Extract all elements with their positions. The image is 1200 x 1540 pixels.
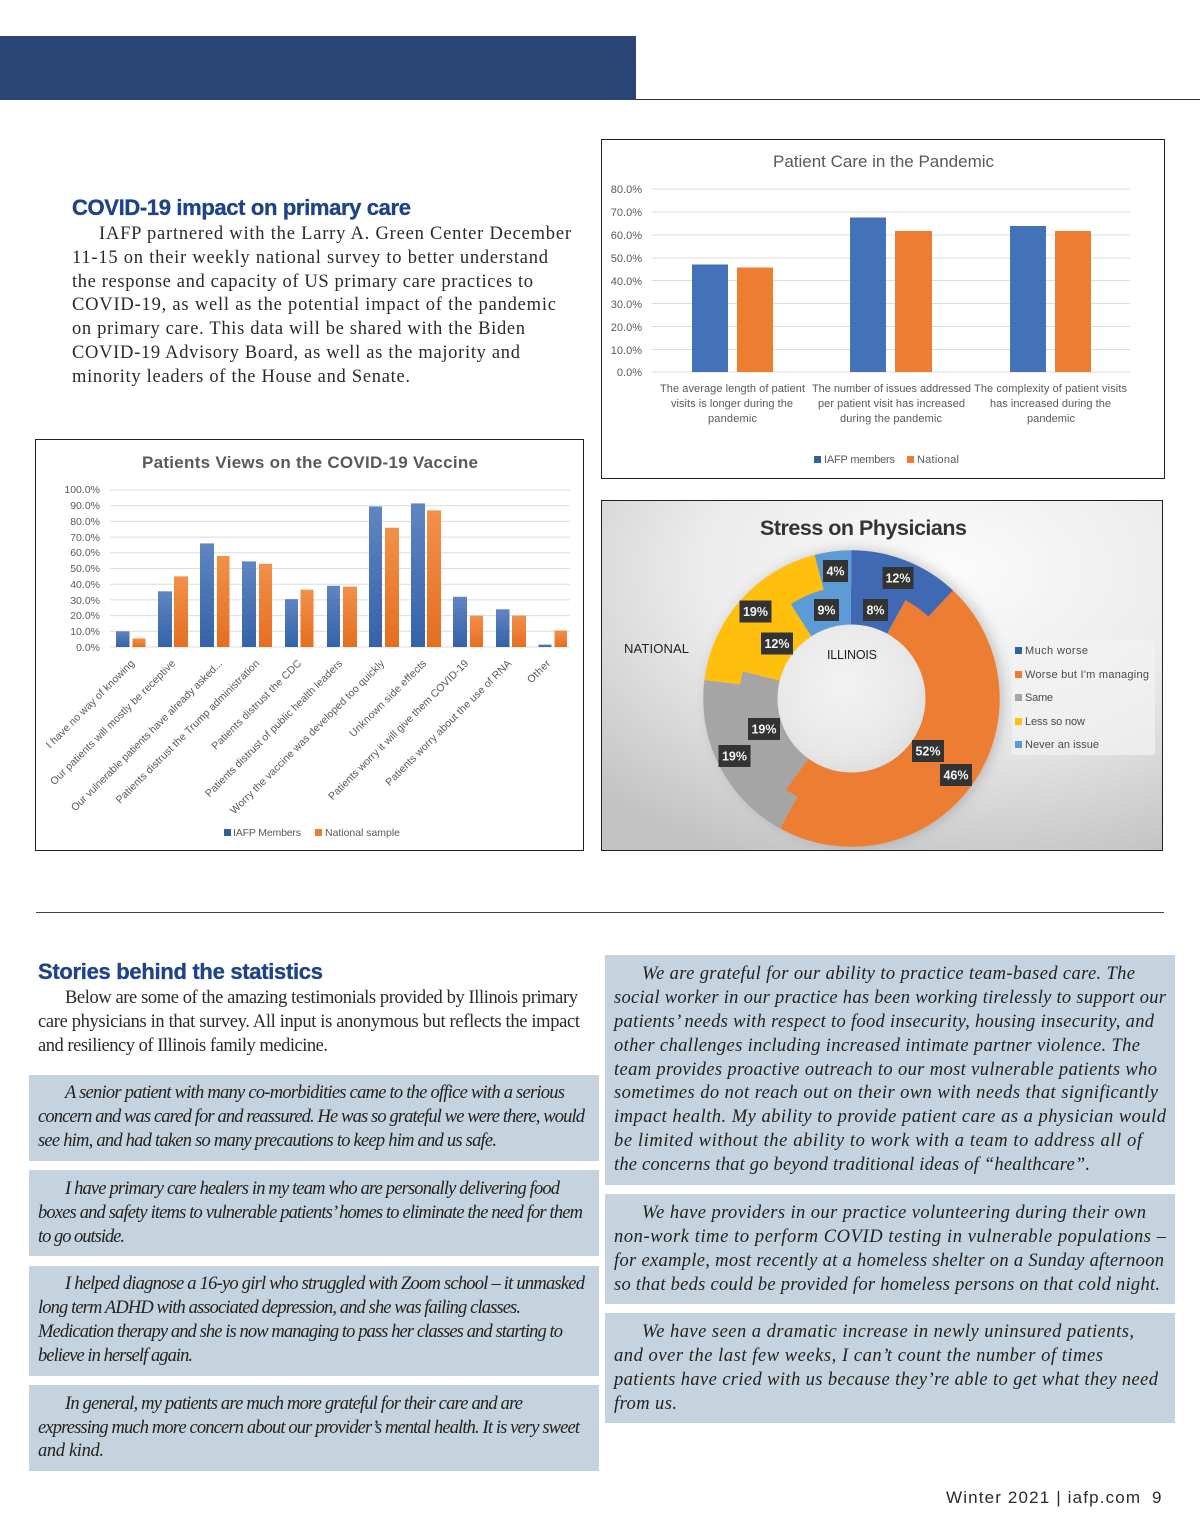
quote panel: team-based care: patients’ needs with respect to food insecurity, housing insecurity, and — [612, 1012, 1155, 1032]
text block: COVID-19 impact on primary care: 11-15 on their weekly national survey to better understand — [72, 248, 549, 268]
chart title: Patient Care in the Pandemic — [773, 152, 994, 171]
heading: Stories behind the statistics: Stories behind the statistics — [38, 959, 323, 984]
legend: National sample — [325, 827, 400, 839]
quote panel: 16-yo girl: believe in herself again. — [38, 1346, 193, 1366]
legend: Never an issue — [1025, 739, 1099, 751]
y axis labels: 10.0% — [611, 345, 642, 357]
quote panel: team-based care: social worker in our practice has been working tirelessly to support our — [614, 988, 1167, 1008]
quote panel: team-based care: the concerns that go beyond traditional ideas of “healthcare”. — [614, 1155, 1090, 1175]
y axis labels: 40.0% — [70, 579, 100, 591]
quote panel: uninsured patients: We have seen a dramatic increase in newly uninsured patients, — [642, 1322, 1134, 1342]
quote panel: team-based care: be limited without the ability to work with a team to address all of — [614, 1131, 1145, 1151]
rotated category labels: I have no way of knowing — [44, 658, 137, 751]
rotated category labels: Worry the vaccine was developed too quickly — [228, 657, 388, 817]
data labels: 12% — [764, 637, 790, 651]
quote panel: team-based care: impact health. My ability to provide patient care as a physician would — [614, 1107, 1167, 1127]
y axis labels: 30.0% — [70, 595, 100, 607]
quote panel: primary care healers — [29, 1170, 599, 1256]
chart: Patient Care in the Pandemic — [602, 140, 1164, 478]
data labels: 52% — [915, 744, 941, 758]
data labels: 9% — [817, 604, 836, 618]
data labels: 19% — [743, 605, 768, 619]
legend: Same — [1025, 692, 1053, 704]
category labels: The number of issues addressed — [812, 383, 971, 395]
quote panel: team-based care: We are grateful for our ability to practice team-based care. The — [642, 964, 1135, 984]
category labels: during the pandemic — [840, 413, 942, 425]
legend — [224, 827, 400, 839]
quote panel: senior patient: A senior patient with many co-morbidities came to the office with a serious — [63, 1083, 565, 1103]
y axis labels: 20.0% — [70, 610, 100, 622]
category labels: has increased during the — [990, 398, 1111, 410]
y axis labels: 60.0% — [611, 230, 642, 242]
quote panel: uninsured patients: and over the last few weeks, I can’t count the number of times — [614, 1346, 1103, 1366]
y axis labels: 60.0% — [70, 547, 100, 559]
chart title: Stress on Physicians — [760, 516, 967, 540]
data labels: 46% — [943, 768, 969, 782]
rotated category labels: Other — [525, 657, 553, 686]
rotated category labels: Patients distrust the CDC — [209, 657, 304, 752]
y axis labels: 70.0% — [611, 207, 642, 219]
y axis labels: 0.0% — [76, 642, 100, 654]
y axis labels: 10.0% — [70, 626, 100, 638]
quote panel: COVID testing volunteers: We have providers in our practice volunteering during their own — [642, 1203, 1146, 1223]
text block: Stories behind the statistics: Below are some of the amazing testimonials provided by Illinois primary — [65, 988, 579, 1008]
data labels: 12% — [885, 572, 911, 586]
category labels — [660, 383, 1128, 425]
legend: IAFP Members — [233, 827, 301, 839]
quote panel: more grateful: expressing much more concern about our provider’s mental health. It is very sweet — [38, 1418, 581, 1438]
rotated category labels: Patients distrust of public health leaders — [203, 658, 345, 800]
text block: Stories behind the statistics: and resiliency of Illinois family medicine. — [38, 1036, 328, 1056]
quote panel: COVID testing volunteers: for example, most recently at a homeless shelter on a Sunday afternoon — [614, 1251, 1164, 1271]
text block: COVID-19 impact on primary care: IAFP partnered with the Larry A. Green Center December — [99, 224, 571, 244]
legend: Much worse — [1025, 645, 1088, 657]
legend: Less so now — [1025, 716, 1085, 728]
text block: COVID-19 impact on primary care: the response and capacity of US primary care practices to — [72, 272, 533, 292]
rotated category labels: Patients worry it will give them COVID-19 — [326, 658, 471, 803]
footer: issue and page number: Winter 2021 | iafp.com — [946, 1488, 1140, 1507]
y axis labels: 80.0% — [611, 184, 642, 196]
data labels: 19% — [751, 722, 777, 736]
category labels: The average length of patient — [660, 383, 805, 395]
y axis labels — [64, 484, 100, 654]
chart title: Patients Views on the COVID-19 Vaccine — [142, 453, 478, 472]
quote panel: primary care healers: boxes and safety items to vulnerable patients’ homes to eliminate the need for them — [38, 1203, 583, 1223]
y axis labels: 0.0% — [617, 367, 642, 379]
category labels: pandemic — [708, 413, 758, 425]
quote panel: primary care healers: I have primary care healers in my team who are personally delivering food — [64, 1179, 561, 1199]
legend: Worse but I'm managing — [1025, 669, 1149, 681]
quote panel: 16-yo girl: long term ADHD with associated depression, and she was failing classes. — [38, 1298, 521, 1318]
category labels: The complexity of patient visits — [974, 383, 1128, 395]
quote panel: team-based care: team provides proactive outreach to our most vulnerable patients who — [614, 1060, 1157, 1080]
ring labels — [624, 641, 877, 662]
footer: issue and page number: 9 — [1152, 1488, 1161, 1507]
rotated category labels: Patients distrust the Trump administration — [114, 658, 262, 806]
y axis labels: 100.0% — [64, 484, 100, 496]
y axis labels: 90.0% — [70, 500, 100, 512]
text block: COVID-19 impact on primary care: COVID-19, as well as the potential impact of the pandemic — [72, 295, 556, 315]
text block: Stories behind the statistics — [38, 959, 581, 1056]
rotated category labels: Our patients will mostly be receptive — [48, 658, 178, 788]
legend: National — [917, 454, 959, 466]
legend — [1012, 639, 1155, 755]
quote panel: more grateful — [29, 1385, 599, 1471]
category labels: pandemic — [1027, 413, 1076, 425]
ring labels: NATIONAL — [624, 641, 689, 656]
text block: COVID-19 impact on primary care: COVID-19 Advisory Board, as well as the majority and — [72, 343, 521, 363]
y axis labels: 80.0% — [70, 516, 100, 528]
text block: COVID-19 impact on primary care: on primary care. This data will be shared with the Biden — [72, 319, 525, 339]
legend — [814, 454, 959, 466]
quote panel: senior patient: see him, and had taken so many precautions to keep him and us safe. — [38, 1131, 497, 1151]
data labels — [718, 560, 972, 786]
chart: Patients Views on the COVID-19 Vaccine — [36, 440, 584, 850]
rotated category labels — [44, 657, 553, 817]
data labels: 8% — [866, 604, 885, 618]
y axis labels: 50.0% — [70, 563, 100, 575]
quote panel: 16-yo girl: Medication therapy and she is now managing to pass her classes and starting to — [37, 1322, 563, 1342]
category labels: per patient visit has increased — [818, 398, 965, 410]
y axis labels: 30.0% — [611, 299, 642, 311]
text block: COVID-19 impact on primary care: minority leaders of the House and Senate. — [72, 367, 410, 387]
quote panel: 16-yo girl — [29, 1266, 599, 1376]
heading: COVID-19 impact: COVID-19 impact on primary care — [72, 195, 411, 220]
rotated category labels: Patients worry about the use of RNA — [383, 658, 514, 788]
bars — [116, 503, 567, 647]
rotated category labels: Unknown side effects — [347, 658, 429, 740]
y axis labels — [611, 184, 642, 379]
y axis labels: 70.0% — [70, 532, 100, 544]
chart: Stress on Physicians donut — [602, 500, 1162, 850]
quote panel: 16-yo girl: I helped diagnose a 16-yo girl who struggled with Zoom school – it unmasked — [64, 1274, 586, 1294]
quote panel: team-based care — [605, 955, 1175, 1185]
quote panel: COVID testing volunteers — [605, 1194, 1175, 1304]
quote panel: senior patient: concern and was cared for and reassured. He was so grateful we were there, would — [38, 1107, 586, 1127]
y axis labels: 20.0% — [611, 322, 642, 334]
quote panel: uninsured patients: patients have cried with us because they’re able to get what they need — [612, 1370, 1159, 1390]
data labels: 4% — [826, 564, 845, 578]
quote panel: COVID testing volunteers: non-work time to perform COVID testing in vulnerable populations – — [614, 1227, 1167, 1247]
text block: Stories behind the statistics: care physicians in that survey. All input is anonymous but reflects the impact — [38, 1012, 581, 1032]
category labels: visits is longer during the — [671, 398, 793, 410]
text block: COVID-19 impact on primary care — [72, 195, 571, 387]
donut rings — [722, 568, 982, 828]
quote panel: more grateful: and kind. — [38, 1441, 104, 1461]
legend: IAFP members — [824, 454, 896, 466]
y axis labels: 40.0% — [611, 276, 642, 288]
quote panel: uninsured patients — [605, 1313, 1175, 1423]
data labels: 19% — [722, 750, 747, 764]
rotated category labels: Our vulnerable patients have already asked... — [69, 658, 225, 814]
quote panel: senior patient — [29, 1075, 599, 1161]
bars — [692, 218, 1091, 372]
page header banner — [0, 36, 1200, 100]
quote panel: COVID testing volunteers: so that beds could be provided for homeless persons on that cold night. — [614, 1275, 1160, 1295]
quote panel: uninsured patients: from us. — [614, 1394, 677, 1414]
quote panel: team-based care: sometimes do not reach out on their own with needs that significantly — [614, 1083, 1159, 1103]
ring labels: ILLINOIS — [827, 648, 877, 662]
quote panel: team-based care: other challenges including increased intimate partner violence. The — [614, 1036, 1140, 1056]
quote panel: more grateful: In general, my patients are much more grateful for their care and are — [64, 1394, 523, 1414]
quote panel: primary care healers: to go outside. — [38, 1227, 125, 1247]
y axis labels: 50.0% — [611, 253, 642, 265]
